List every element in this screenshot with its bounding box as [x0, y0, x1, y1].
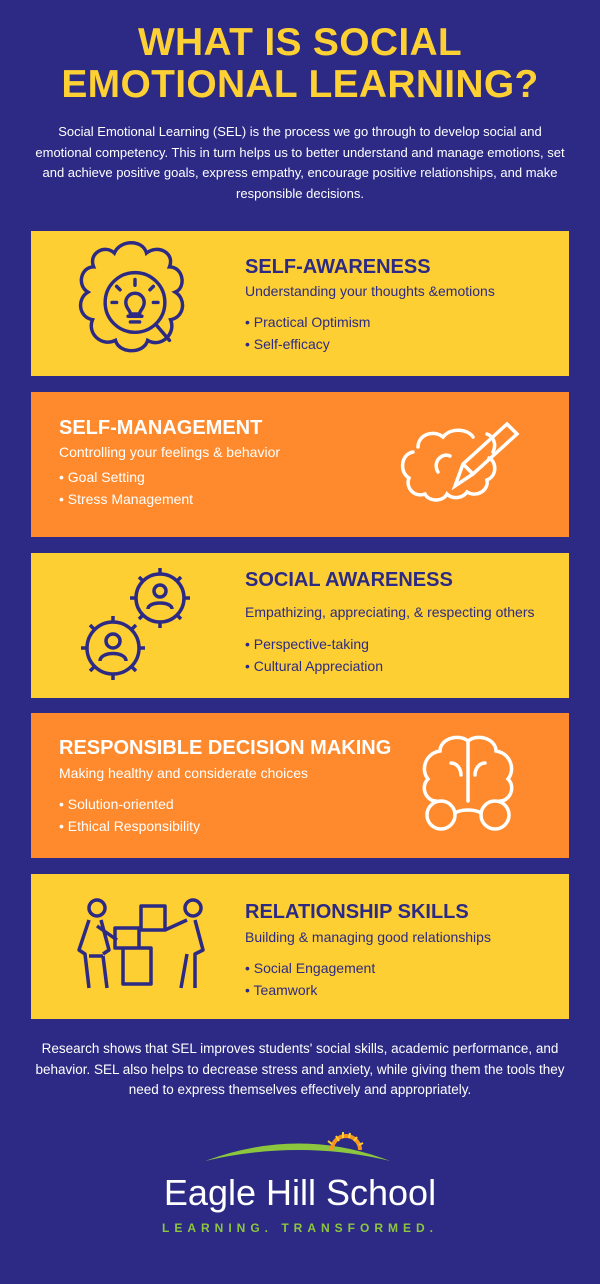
- intro text: Social Emotional Learning (SEL) is the process we go through to develop social and emotional competency. This in turn helps us to better understand and manage emotions, set and achieve positive goals, express empathy, encourage positive relationships, and make responsible decisions.: [35, 124, 565, 200]
- subtitle: Empathizing, appreciating, & respecting others: [245, 604, 534, 620]
- icon: brain with glasses: [422, 736, 514, 831]
- subtitle: Building & managing good relationships: [245, 929, 491, 945]
- subtitle: Controlling your feelings & behavior: [59, 444, 280, 460]
- bullets: • Cultural Appreciation: [245, 658, 383, 674]
- heading: RELATIONSHIP SKILLS: [245, 901, 469, 923]
- title: WHAT IS SOCIAL: [138, 21, 462, 64]
- heading: SOCIAL AWARENESS: [245, 569, 453, 591]
- bullets: • Ethical Responsibility: [59, 818, 200, 834]
- panel: responsible decision making: [31, 713, 569, 858]
- icon: people with puzzle: [77, 898, 205, 988]
- subtitle: Understanding your thoughts &emotions: [245, 283, 495, 299]
- bullets: • Goal Setting: [59, 469, 145, 485]
- panel: self-awareness: [31, 231, 569, 376]
- bullets: • Stress Management: [59, 491, 193, 507]
- panel: self-management: [31, 392, 569, 537]
- panel: relationship skills: [31, 874, 569, 1019]
- logo: [162, 1132, 438, 1235]
- bullets: [59, 469, 193, 507]
- tagline: LEARNING. TRANSFORMED.: [162, 1221, 438, 1235]
- icon: gears with people: [81, 568, 190, 680]
- title: [61, 21, 539, 106]
- icon: brain with lightbulb: [78, 241, 184, 352]
- heading: SELF-AWARENESS: [245, 256, 431, 278]
- panel: social awareness: [31, 553, 569, 698]
- bullets: • Perspective-taking: [245, 636, 369, 652]
- bullets: [245, 960, 376, 998]
- bullets: • Practical Optimism: [245, 314, 370, 330]
- icon: brain with pencil: [400, 422, 520, 502]
- bullets: [245, 636, 383, 674]
- heading: RESPONSIBLE DECISION MAKING: [59, 737, 391, 759]
- heading: SELF-MANAGEMENT: [59, 417, 262, 439]
- bullets: • Self-efficacy: [245, 336, 330, 352]
- title: EMOTIONAL LEARNING?: [61, 63, 539, 106]
- bullets: • Teamwork: [245, 982, 317, 998]
- closing text: Research shows that SEL improves students' social skills, academic performance, and behavior. SEL also helps to decrease stress and anxiety, while giving them the tools they need to express themselves effectively and appropriately.: [35, 1041, 565, 1097]
- bullets: [245, 314, 370, 352]
- icon: hill and sun: [205, 1132, 390, 1161]
- bullets: [59, 796, 200, 834]
- school name: Eagle Hill School: [164, 1172, 436, 1213]
- bullets: • Social Engagement: [245, 960, 375, 976]
- subtitle: Making healthy and considerate choices: [59, 765, 308, 781]
- bullets: • Solution-oriented: [59, 796, 174, 812]
